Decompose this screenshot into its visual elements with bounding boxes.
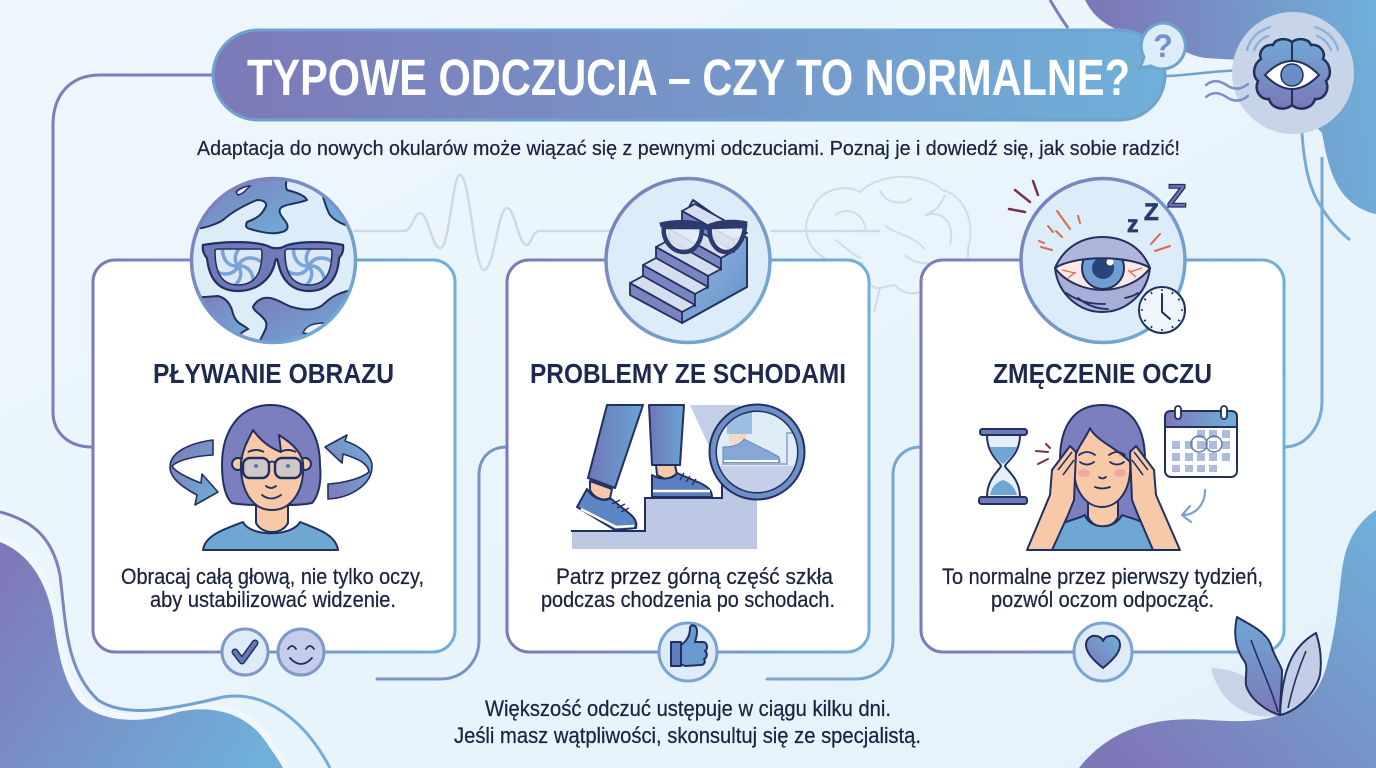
icon: speech bubble with question mark: ? [1153, 28, 1173, 64]
stair wall [650, 200, 747, 323]
sleep letters: Z [1167, 178, 1187, 214]
panel: card 3 frame [921, 260, 1284, 652]
decorative blob: bottom left [0, 542, 283, 768]
card 3 text: To normalne przez pierwszy tydzień, [942, 564, 1263, 589]
circle icon: floating image with swirly glasses [190, 170, 360, 350]
connector line: card 1 to card 2 [377, 447, 507, 679]
circle icon: tired eye [1009, 178, 1187, 342]
connector line: card 2 to card 3 [767, 447, 921, 679]
left arm and hand [1027, 446, 1076, 550]
front leg [649, 405, 684, 465]
glasses on stairs [660, 222, 747, 252]
panel: card 2 frame [507, 260, 869, 652]
icon: speech bubble with question mark [1140, 23, 1185, 69]
card 3 text: pozwól oczom odpocząć. [991, 587, 1214, 612]
badge: smile [278, 629, 324, 675]
panel: card 1 frame [93, 260, 455, 652]
badge: heart [1074, 623, 1132, 681]
clock [1139, 287, 1185, 333]
footer note: Jeśli masz wątpliwości, skonsultuj się ze specjalistą. [454, 723, 921, 748]
card 3 text [942, 564, 1263, 612]
card 2 text: podczas chodzenia po schodach. [541, 587, 835, 612]
swirly glasses [203, 240, 343, 292]
badge: check [222, 629, 268, 675]
title text: TYPOWE ODCZUCIA – CZY TO NORMALNE? [247, 49, 1130, 106]
heading: card 2: PROBLEMY ZE SCHODAMI [530, 358, 846, 389]
card 1 text: Obracaj całą głową, nie tylko oczy, [121, 564, 424, 589]
icon: brain with eye [1232, 12, 1354, 134]
card 2 text: Patrz przez górną część szkła [556, 564, 834, 589]
tired eye [1055, 237, 1150, 312]
right arm and hand [1130, 446, 1180, 550]
card 1 text [121, 564, 424, 612]
eye strain marks [1009, 181, 1038, 212]
icon: hourglass [979, 429, 1027, 504]
heading: card 3: ZMĘCZENIE OCZU [993, 358, 1212, 389]
icon: rotate arrow right [325, 435, 372, 499]
sleep letters [1127, 178, 1187, 237]
circle icon: stairs with glasses [606, 178, 770, 342]
icon: waves [1206, 81, 1248, 100]
decorative blob: bottom right [1079, 510, 1376, 768]
background ECG line [353, 175, 880, 270]
footer note: Większość odczuć ustępuje w ciągu kilku dni. [485, 696, 891, 721]
title banner [213, 30, 1165, 120]
card 2 text [541, 564, 835, 612]
icon: leaves [1211, 617, 1321, 717]
heading: card 1: PŁYWANIE OBRAZU [153, 358, 394, 389]
illustration: climbing stairs with magnifier [571, 404, 804, 549]
icon: rotate arrow left [170, 440, 218, 505]
card 1 text: aby ustabilizować widzenie. [150, 587, 396, 612]
decorative line: bottom left [0, 512, 330, 768]
footer note [454, 696, 921, 748]
icon: calendar [1165, 406, 1237, 477]
connector lines: top right [1050, 0, 1350, 447]
background brain outline [806, 177, 971, 312]
icon: curved arrow [1182, 490, 1205, 522]
illustration: woman with tired eyes [1027, 405, 1180, 550]
decorative blob: top right [1085, 0, 1376, 214]
sleep letters: Z [1144, 199, 1159, 226]
back leg [588, 405, 643, 488]
magnifier [710, 404, 804, 500]
stair steps [630, 204, 747, 323]
badge: thumbs up [659, 623, 717, 681]
illustration: person turning head [203, 405, 338, 550]
subtitle: Adaptacja do nowych okularów może wiązać się z pewnymi odczuciami. Poznaj je i dowiedź się, jak sobie radzić! [197, 137, 1180, 160]
connector line: left of title to card 1 [53, 75, 213, 447]
sleep letters: z [1127, 211, 1138, 237]
